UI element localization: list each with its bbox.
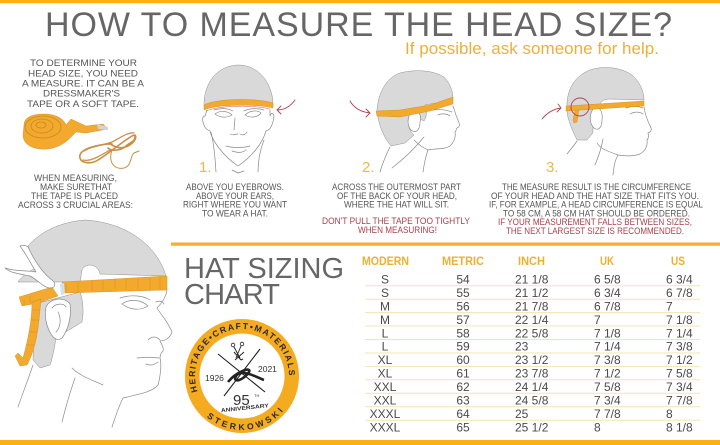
table rows: 7 1/4 <box>594 340 621 354</box>
badge: Sterkowski 95th anniversary: ANNIVERSARY <box>221 403 269 414</box>
text: tape placement note: MAKE SURETHAT <box>40 182 112 193</box>
table rows: 24 5/8 <box>515 394 549 408</box>
table rows: 55 <box>456 286 470 300</box>
table rows: 7 1/8 <box>594 326 621 340</box>
table rows: 7 <box>666 299 673 313</box>
heading: hat sizing chart <box>184 253 344 311</box>
table rows: 58 <box>456 326 470 340</box>
table rows: 21 1/8 <box>515 272 549 286</box>
table header: METRIC <box>442 256 484 268</box>
table rows: XXXL <box>370 420 401 434</box>
arrow: points to back of head <box>350 101 370 117</box>
text: step 2 <box>322 182 471 236</box>
table rows: 56 <box>456 299 470 313</box>
table rows: 6 7/8 <box>666 286 693 300</box>
table rows: 25 <box>515 407 529 421</box>
intro text: TO DETERMINE YOUR <box>30 58 137 69</box>
text: step 2: ACROSS THE OUTERMOST PART <box>332 182 461 193</box>
heading: hat sizing chart: HAT SIZING <box>184 253 344 285</box>
table rows: 7 1/4 <box>666 326 693 340</box>
table rows: 7 3/8 <box>594 353 621 367</box>
table rows: 61 <box>456 367 470 381</box>
table rows: 24 1/4 <box>515 380 549 394</box>
table rows: 6 3/4 <box>666 272 693 286</box>
text: step 1: RIGHT WHERE YOU WANT <box>183 200 287 210</box>
table rows: 23 <box>515 340 529 354</box>
table: hat sizes <box>362 256 700 434</box>
table rows: 6 3/4 <box>594 286 621 300</box>
table rows: 64 <box>456 407 470 421</box>
text: step 1: ABOVE YOUR EARS, <box>196 191 274 202</box>
arrow: points to the front tape <box>277 100 295 114</box>
table rows: 7 3/4 <box>666 380 693 394</box>
intro text: A MEASURE. IT CAN BE A <box>22 78 145 90</box>
badge: Sterkowski 95th anniversary: 95 <box>233 392 250 409</box>
intro text: HEAD SIZE, YOU NEED <box>28 68 138 80</box>
table rows: 6 5/8 <box>594 272 621 286</box>
table rows: L <box>382 340 389 354</box>
table header: MODERN <box>362 256 409 268</box>
table rows: 57 <box>456 313 470 327</box>
intro text: TAPE OR A SOFT TAPE. <box>27 99 139 110</box>
number 3: 3. <box>546 159 559 176</box>
illustration: large head profile with tape <box>5 220 172 427</box>
text: step 1 <box>183 182 287 220</box>
subtitle: If possible, ask someone for help. <box>405 39 659 58</box>
text: step 3: THE NEXT LARGEST SIZE IS RECOMMENDED. <box>506 226 684 237</box>
arrow: points to tape join <box>542 104 561 119</box>
table rows: XXL <box>374 380 397 394</box>
text: step 2: WHEN MEASURING! <box>358 225 437 236</box>
table rows: S <box>381 286 389 300</box>
illustration: head front view <box>203 65 295 173</box>
badge: Sterkowski 95th anniversary: HERITAGE•CRAFT•MATERIALS <box>189 323 295 393</box>
text: step 1: ABOVE YOU EYEBROWS. <box>186 182 284 193</box>
table rows: 21 1/2 <box>515 286 549 300</box>
table rows: 65 <box>456 420 470 434</box>
badge: Sterkowski 95th anniversary <box>185 319 299 433</box>
icon: coiled tape cord <box>80 133 139 168</box>
text: tape placement note: THE TAPE IS PLACED <box>31 191 118 202</box>
table rows: 7 1/8 <box>666 313 693 327</box>
table rows: 7 3/8 <box>666 340 693 354</box>
table header <box>362 256 685 268</box>
intro text: DRESSMAKER'S <box>43 88 120 100</box>
table rows: 59 <box>456 340 470 354</box>
badge: Sterkowski 95th anniversary: TH <box>254 393 259 398</box>
table rows <box>370 272 693 434</box>
table rows: 8 <box>594 420 601 434</box>
text: step 2: OF THE BACK OF YOUR HEAD, <box>337 191 457 202</box>
table rows: M <box>380 299 390 313</box>
table rows: L <box>382 326 389 340</box>
table rows: S <box>381 272 389 286</box>
table rows: 60 <box>456 353 470 367</box>
table rows: 23 7/8 <box>515 367 549 381</box>
table header: US <box>671 256 685 268</box>
table rows: 25 1/2 <box>515 420 549 434</box>
table rows: 54 <box>456 272 470 286</box>
text: tape placement note <box>18 173 133 211</box>
table rows: XXL <box>374 394 397 408</box>
table rows: 7 3/4 <box>594 394 621 408</box>
text: tape placement note: WHEN MEASURING, <box>34 173 117 184</box>
table rows: 8 <box>666 407 673 421</box>
table rows: 63 <box>456 394 470 408</box>
number 1: 1. <box>199 159 212 176</box>
text: tape placement note: ACROSS 3 CRUCIAL AREAS: <box>18 200 133 211</box>
text: step 3: TO 58 CM, A 58 CM HAT SHOULD BE ORDERED. <box>503 208 690 220</box>
badge: Sterkowski 95th anniversary: 1926 <box>205 373 224 383</box>
table rows: XL <box>378 367 393 381</box>
table rows: 22 5/8 <box>515 326 549 340</box>
icon: rolled measuring tape <box>23 114 108 149</box>
text: step 3 <box>489 182 704 237</box>
text: step 1: TO WEAR A HAT. <box>202 208 268 220</box>
table rows: XL <box>378 353 393 367</box>
heading: hat sizing chart: CHART <box>184 279 280 311</box>
table header: INCH <box>518 256 545 268</box>
table rows: 8 1/8 <box>666 420 693 434</box>
table rows: 6 7/8 <box>594 299 621 313</box>
table rows: 22 1/4 <box>515 313 549 327</box>
illustration: head side view at back <box>350 71 459 172</box>
badge: Sterkowski 95th anniversary: 2021 <box>258 364 277 374</box>
table rows: M <box>380 313 390 327</box>
number 2: 2. <box>362 159 375 176</box>
text: step 2: DON'T PULL THE TAPE TOO TIGHTLY <box>322 216 471 227</box>
table rows: XXXL <box>370 407 401 421</box>
illustration: head side view with measurement <box>542 68 651 175</box>
table rows: 21 7/8 <box>515 299 549 313</box>
table rows: 7 1/2 <box>594 367 621 381</box>
table rows: 7 7/8 <box>666 394 693 408</box>
text: step 2: WHERE THE HAT WILL SIT. <box>344 200 449 210</box>
title: HOW TO MEASURE THE HEAD SIZE? <box>45 6 672 44</box>
table rows: 7 5/8 <box>594 380 621 394</box>
table rows: 62 <box>456 380 470 394</box>
intro text <box>22 58 145 110</box>
table rows: 7 <box>594 313 601 327</box>
table rows: 7 7/8 <box>594 407 621 421</box>
badge: Sterkowski 95th anniversary: STERKOWSKI <box>207 408 283 430</box>
table rows: 23 1/2 <box>515 353 549 367</box>
table rows: 7 5/8 <box>666 367 693 381</box>
table rows: 7 1/2 <box>666 353 693 367</box>
table header: UK <box>600 256 615 268</box>
